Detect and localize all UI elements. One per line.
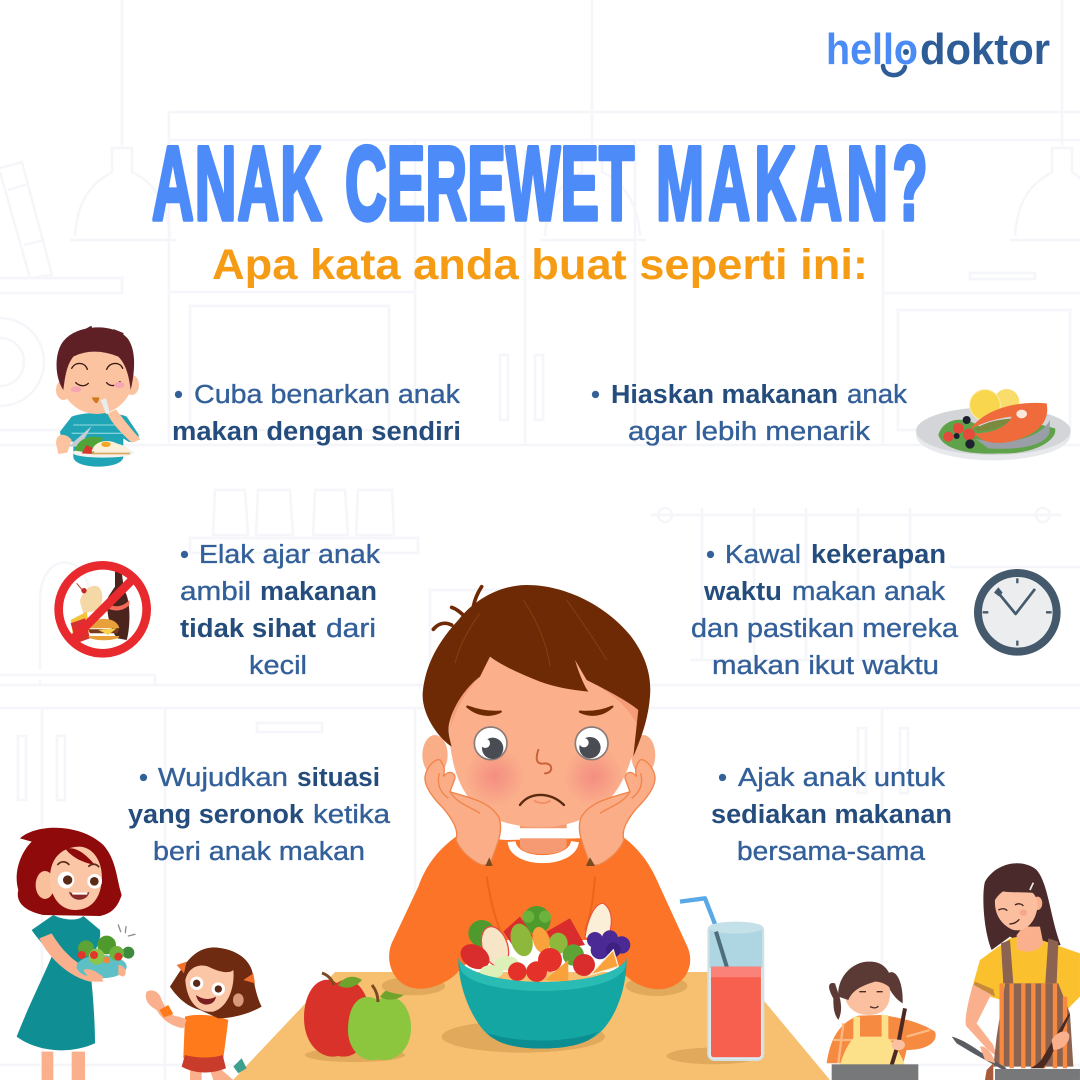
text block: tip 3: tidak sihat (180, 615, 317, 643)
text block: tip 5: Wujudkan (158, 764, 288, 792)
text block: tip 4: • (706, 541, 715, 569)
text block: tip 3: kecil (249, 652, 307, 680)
text block: tip 3: ambil (180, 578, 251, 606)
fruits (523, 906, 551, 934)
text block: tip 5: situasi (297, 764, 380, 792)
icon: clock (978, 573, 1057, 652)
text block: tip 5 (128, 764, 391, 866)
text block: tip 3 (180, 541, 380, 680)
icon: boy eating (56, 327, 141, 467)
text block: tip 4: dan pastikan mereka (691, 615, 959, 643)
text block: tip 1: makan dengan sendiri (172, 418, 461, 446)
text block: tip 6: • (718, 764, 727, 792)
illustration: cooking mother (952, 863, 1080, 1080)
icon: no junk food (59, 565, 147, 653)
glass of juice (680, 898, 717, 928)
text block: tip 4: makan anak (792, 578, 945, 606)
text block: tip 2: anak (847, 381, 907, 409)
title: ANAK (152, 124, 322, 242)
illustration: mother with salad (17, 828, 135, 1080)
logo: hellodoktor: doktor (920, 25, 1050, 74)
text block: tip 6 (711, 764, 952, 866)
illustration: table (233, 972, 830, 1080)
text block: tip 5: yang seronok (128, 801, 305, 829)
text block: tip 4: makan ikut waktu (712, 652, 939, 680)
illustration: apples (304, 973, 411, 1062)
text block: tip 6: bersama-sama (737, 838, 926, 866)
text block: tip 1 (172, 381, 461, 446)
boy hair (423, 585, 650, 757)
text block: tip 1: • (174, 381, 183, 409)
subtitle: Apa kata anda buat seperti ini: (212, 241, 868, 289)
text block: tip 2: Hiaskan makanan (611, 381, 838, 409)
title: MAKAN? (656, 124, 928, 242)
icon: salmon plate (916, 389, 1071, 460)
boy left hand (425, 760, 501, 865)
text block: tip 1: Cuba benarkan anak (194, 381, 460, 409)
illustration: sad boy with bowl (382, 585, 763, 1064)
text block: tip 4: Kawal (725, 541, 801, 569)
text block: tip 2: • (591, 381, 600, 409)
title (152, 124, 928, 242)
text block: tip 6: sediakan makanan (711, 801, 952, 829)
text block: tip 5: ketika (313, 801, 391, 829)
illustration: cooking girl (827, 962, 936, 1080)
text block: tip 4: waktu (703, 578, 782, 606)
text block: tip 3: makanan (260, 578, 377, 606)
text block: tip 5: beri anak makan (153, 838, 365, 866)
text block: tip 4 (691, 541, 959, 680)
logo: hellodoktor (826, 25, 1050, 75)
text block: tip 4: kekerapan (811, 541, 946, 569)
boy head (422, 735, 448, 775)
text block: tip 5: • (139, 764, 148, 792)
title: CEREWET (345, 124, 634, 242)
text block: tip 6: Ajak anak untuk (738, 764, 945, 792)
bowl (458, 958, 627, 1049)
boy shirt (389, 837, 690, 989)
text block: tip 2 (591, 381, 907, 446)
text block: tip 3: Elak ajar anak (199, 541, 380, 569)
text block: tip 3: • (180, 541, 189, 569)
text block: tip 2: agar lebih menarik (628, 418, 870, 446)
boy face (474, 727, 507, 760)
illustration: waving girl (146, 947, 262, 1080)
boy right hand (579, 760, 655, 865)
logo: hellodoktor: hello (826, 25, 918, 74)
text block: tip 3: dari (326, 615, 376, 643)
